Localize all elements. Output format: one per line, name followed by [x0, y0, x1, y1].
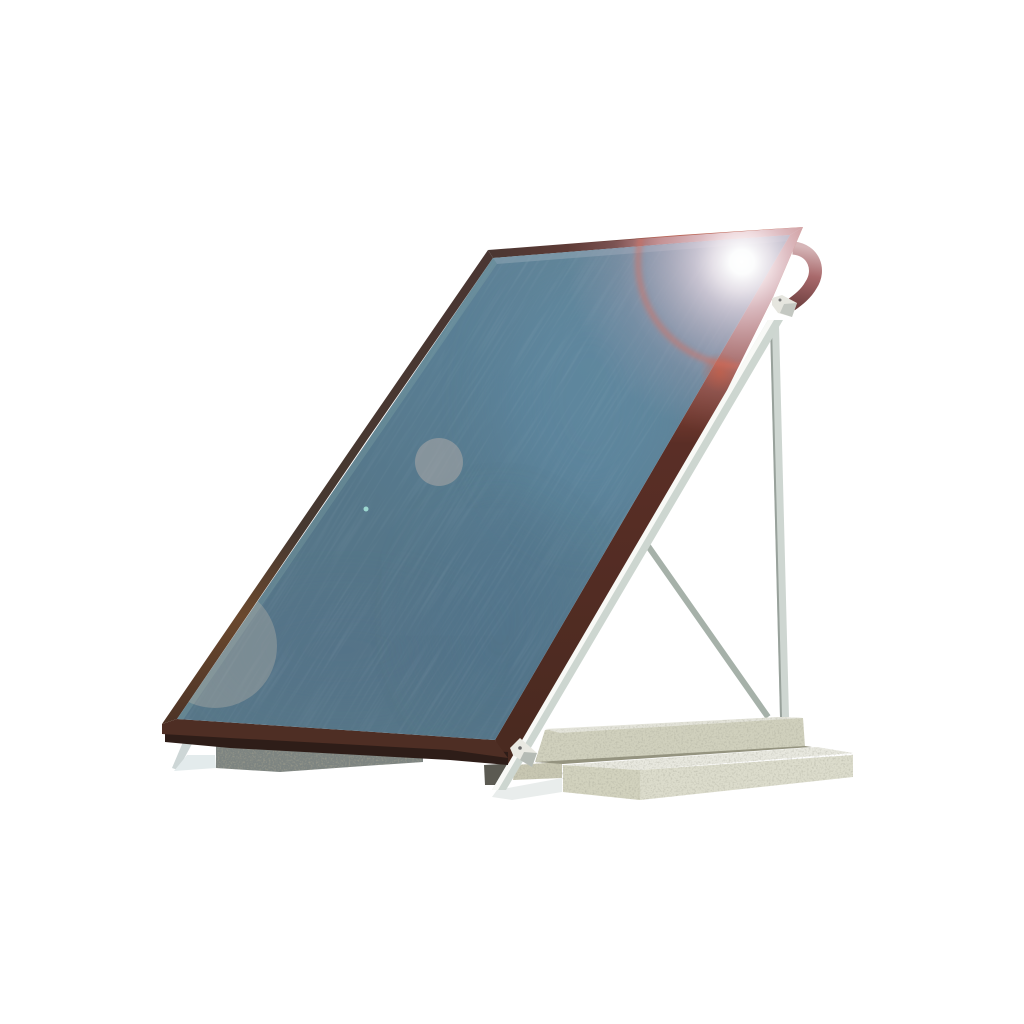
vertical support post — [770, 325, 789, 717]
paving stones — [513, 717, 853, 800]
pipe loop — [791, 248, 815, 305]
red hotspot on frame — [703, 355, 734, 388]
lens flare disc — [415, 438, 463, 486]
solar panel photo illustration — [162, 227, 853, 800]
top clamp — [772, 295, 797, 317]
frame left side — [162, 250, 493, 724]
upper stone — [535, 717, 805, 762]
frame lower lip — [165, 733, 508, 765]
frame right side — [495, 227, 803, 764]
lower stone — [563, 747, 853, 800]
lens flare ring — [633, 238, 740, 370]
diagonal brace — [648, 546, 768, 717]
right foot plate — [492, 778, 562, 800]
bottom clamp — [510, 738, 537, 767]
left foot rail — [172, 742, 216, 771]
sun haze over panel — [582, 227, 803, 420]
stone texture — [514, 718, 853, 800]
stone behind rail — [513, 762, 562, 780]
grey block under panel — [216, 746, 423, 772]
dark block at right foot — [484, 763, 516, 785]
lens flare speck — [364, 506, 368, 512]
inclined rail — [492, 320, 783, 790]
panel frame — [162, 227, 803, 765]
frame top side — [488, 227, 803, 258]
frame bottom face — [162, 719, 508, 758]
glass surface — [177, 235, 790, 740]
stone gap shadow — [535, 746, 812, 764]
lens flare lower disc — [189, 602, 277, 708]
